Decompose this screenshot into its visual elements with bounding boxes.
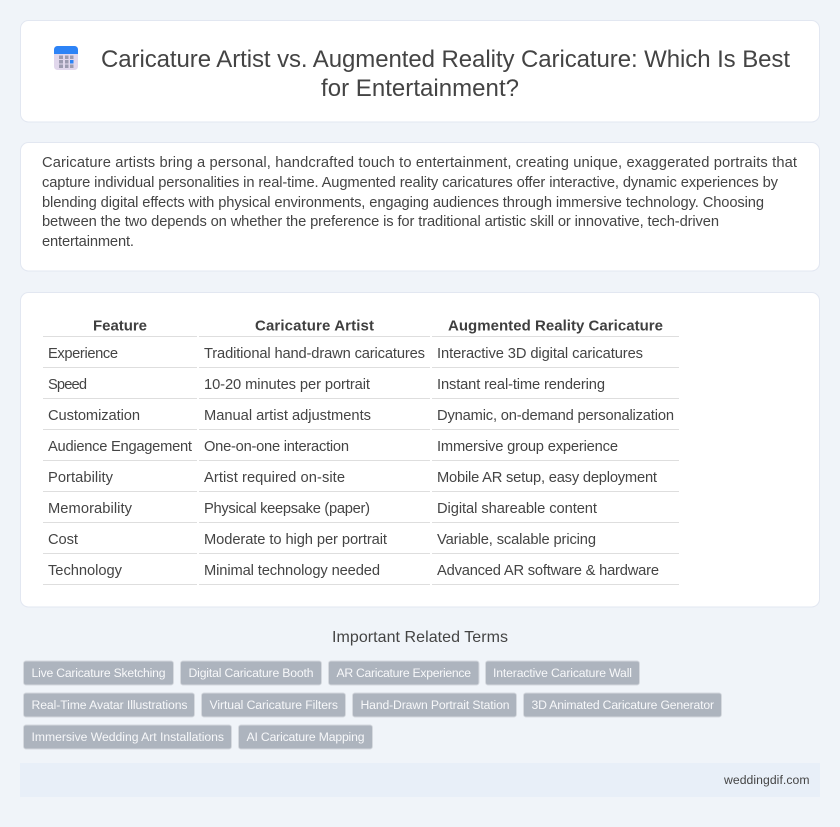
title xyxy=(101,46,790,102)
panel: comparison table xyxy=(20,292,820,607)
row: cost: Moderate to high per portrait xyxy=(204,532,387,548)
tag xyxy=(24,725,232,749)
tag: Virtual Caricature Filters xyxy=(210,698,338,712)
tag: Interactive Caricature Wall xyxy=(493,666,632,680)
tag xyxy=(328,661,479,685)
row: cost: Cost xyxy=(48,532,78,548)
tag: Real-Time Avatar Illustrations xyxy=(32,698,188,712)
row: technology: Technology xyxy=(48,563,123,579)
tag xyxy=(24,693,194,717)
row: cost xyxy=(48,532,596,548)
title: for Entertainment? xyxy=(321,75,519,102)
row: customization xyxy=(48,408,674,424)
row: speed xyxy=(48,377,605,393)
heading: important related terms: Important Related Terms xyxy=(332,629,508,646)
tag: Live Caricature Sketching xyxy=(32,666,166,680)
row: memorability: Physical keepsake (paper) xyxy=(204,501,370,517)
tag xyxy=(202,693,346,717)
row: technology: Advanced AR software & hardware xyxy=(437,563,659,579)
text block: introduction: capture individual personalities in real-time. Augmented reality caricatures offer interactive, dynamic experiences by xyxy=(42,175,779,191)
tag xyxy=(238,725,372,749)
row: portability: Artist required on-site xyxy=(204,470,345,486)
row: experience xyxy=(48,346,643,362)
table header: Augmented Reality Caricature xyxy=(448,318,663,334)
row: experience: Experience xyxy=(48,346,118,362)
tag: Digital Caricature Booth xyxy=(188,666,314,680)
row: cost: Variable, scalable pricing xyxy=(437,532,596,548)
footer: weddingdif.com xyxy=(723,773,810,787)
panel: header xyxy=(20,20,820,122)
tag xyxy=(24,661,174,685)
row: speed: 10-20 minutes per portrait xyxy=(204,377,370,393)
tag xyxy=(180,661,322,685)
row: customization: Manual artist adjustments xyxy=(204,408,371,424)
row: memorability xyxy=(48,501,597,517)
tag: AR Caricature Experience xyxy=(336,666,471,680)
row: experience: Interactive 3D digital caricatures xyxy=(437,346,643,362)
text block: introduction: Caricature artists bring a personal, handcrafted touch to entertainment, creating unique, exaggerated portraits that xyxy=(42,155,797,171)
tag xyxy=(486,661,640,685)
icon: calendar xyxy=(54,46,78,70)
row: audience engagement: Immersive group experience xyxy=(437,439,618,455)
row: memorability: Digital shareable content xyxy=(437,501,597,517)
text block: introduction: between the two depends on whether the preference is for traditional artistic skill or innovative, tech-driven xyxy=(42,214,719,230)
row: portability: Portability xyxy=(48,470,114,486)
row: audience engagement: Audience Engagement xyxy=(48,439,192,455)
table header: Caricature Artist xyxy=(255,318,374,334)
text block: introduction xyxy=(42,155,797,250)
tag: Immersive Wedding Art Installations xyxy=(32,730,224,744)
row: audience engagement xyxy=(48,439,618,455)
row: audience engagement: One-on-one interaction xyxy=(204,439,349,455)
row: customization: Dynamic, on-demand personalization xyxy=(437,408,674,424)
tag: Hand-Drawn Portrait Station xyxy=(360,698,510,712)
table grid lines xyxy=(43,336,679,584)
footer xyxy=(20,763,820,797)
text block: introduction: blending digital effects with physical environments, engaging audiences through immersive technology. Choosing xyxy=(42,195,764,211)
table header: Feature xyxy=(93,318,147,334)
row: portability: Mobile AR setup, easy deployment xyxy=(437,470,657,486)
tag xyxy=(352,693,516,717)
row: speed: Speed xyxy=(48,377,87,393)
tag list: related terms xyxy=(24,661,722,749)
table header xyxy=(93,318,663,334)
row: experience: Traditional hand-drawn caricatures xyxy=(204,346,425,362)
row: memorability: Memorability xyxy=(48,501,133,517)
row: technology: Minimal technology needed xyxy=(204,563,380,579)
row: technology xyxy=(48,563,659,579)
tag: 3D Animated Caricature Generator xyxy=(532,698,714,712)
row: portability xyxy=(48,470,657,486)
tag: AI Caricature Mapping xyxy=(246,730,364,744)
tag xyxy=(524,693,722,717)
title: Caricature Artist vs. Augmented Reality Caricature: Which Is Best xyxy=(101,46,790,73)
text block: introduction: entertainment. xyxy=(42,234,134,250)
panel: introduction xyxy=(20,142,820,271)
row: customization: Customization xyxy=(48,408,140,424)
row: speed: Instant real-time rendering xyxy=(437,377,605,393)
